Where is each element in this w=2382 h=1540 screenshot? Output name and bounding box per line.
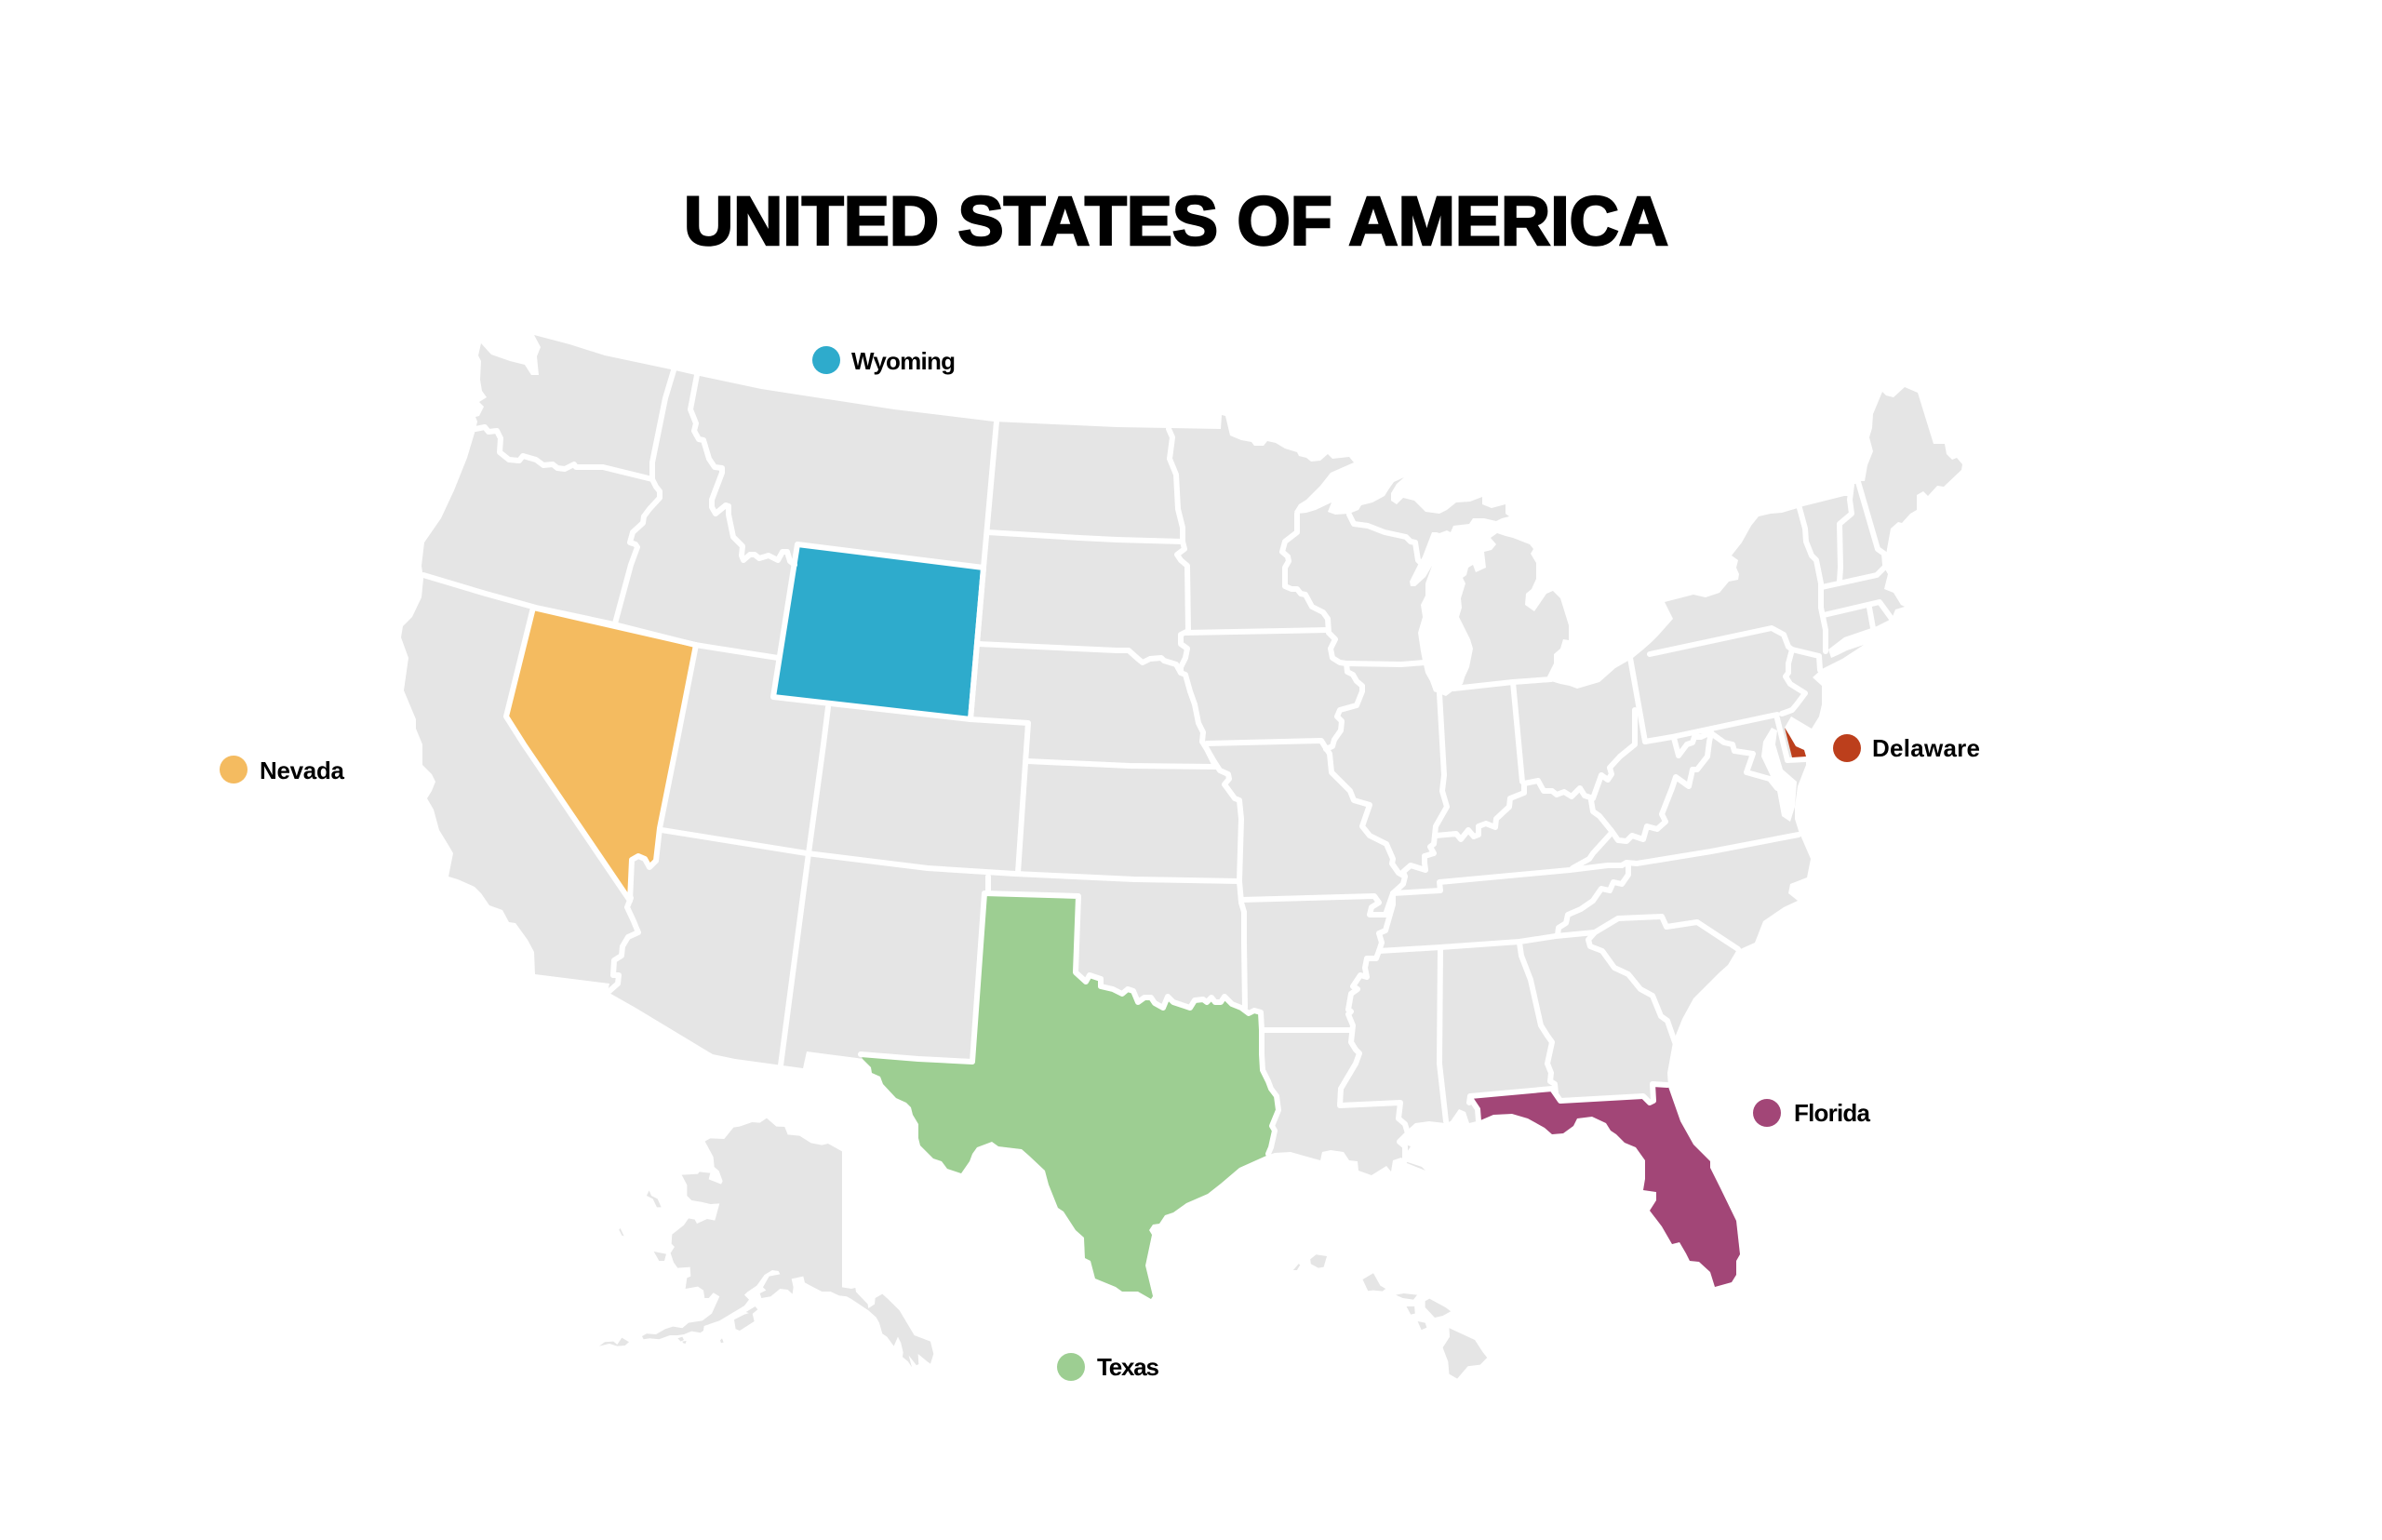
label: Florida	[1753, 1099, 1871, 1127]
Texas land border	[861, 893, 1278, 1154]
label: Nevada	[220, 756, 345, 784]
state: Wyoming	[773, 544, 984, 719]
Wyoming outline	[773, 544, 984, 719]
label: Florida: Florida	[1794, 1099, 1871, 1127]
label: Wyoming: Wyoming	[851, 347, 956, 375]
label: Texas	[1057, 1353, 1159, 1381]
map of the United States	[401, 335, 1962, 1379]
Alaska	[599, 1118, 933, 1367]
Nevada outline	[506, 608, 696, 901]
state: Florida	[1470, 1084, 1740, 1287]
label: Delaware: Delaware	[1872, 734, 1980, 762]
state: Nevada	[506, 608, 696, 901]
state: Delaware	[1785, 728, 1806, 757]
state borders	[423, 370, 1892, 1160]
Hawaii	[1293, 1254, 1487, 1379]
title: UNITED STATES OF AMERICA	[684, 182, 1668, 260]
contiguous states land mass	[401, 335, 1962, 1299]
label: Nevada: Nevada	[260, 757, 345, 784]
label: Texas: Texas	[1097, 1353, 1159, 1381]
state: Texas	[861, 893, 1278, 1299]
